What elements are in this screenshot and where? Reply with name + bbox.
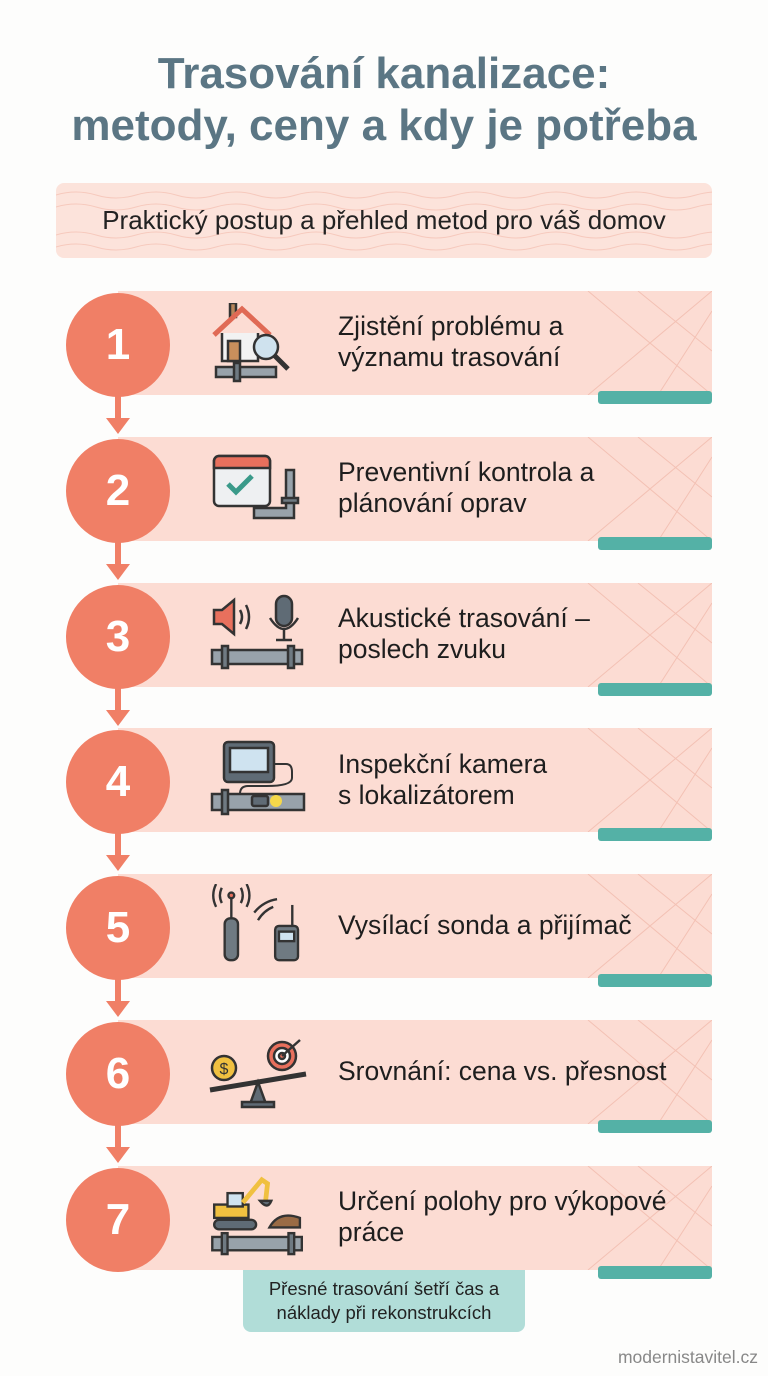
step text 3: Akustické trasování – xyxy=(338,603,590,633)
teal accent bar xyxy=(598,1120,712,1133)
step text 2: Preventivní kontrola a xyxy=(338,457,594,487)
step 3 xyxy=(118,583,712,696)
step 6 xyxy=(118,1020,712,1133)
subtitle banner: Praktický postup a přehled metod pro váš domov xyxy=(102,205,666,235)
arrow 1 xyxy=(106,396,130,434)
icon: house with magnifier xyxy=(212,303,290,382)
teal accent bar xyxy=(598,828,712,841)
number circle 5 xyxy=(66,876,170,980)
title: Trasování kanalizace: xyxy=(158,49,610,98)
number circle 1 xyxy=(66,293,170,397)
arrow 4 xyxy=(106,834,130,871)
callout: Přesné trasování šetří čas a xyxy=(269,1278,499,1299)
number circle 3: 3 xyxy=(106,612,130,661)
icon: speaker and microphone xyxy=(210,594,304,670)
number circle 5: 5 xyxy=(106,903,130,952)
arrow 5 xyxy=(106,980,130,1017)
icon: calendar and pipe xyxy=(212,454,300,520)
number circle 4 xyxy=(66,730,170,834)
step text 5: Vysílací sonda a přijímač xyxy=(338,910,632,940)
title xyxy=(71,49,697,150)
step 7 xyxy=(118,1166,712,1279)
step text 1: významu trasování xyxy=(338,342,560,372)
step 2 xyxy=(118,437,712,550)
step text 2 xyxy=(338,457,594,518)
arrow 2 xyxy=(106,542,130,580)
step 5 xyxy=(118,874,712,987)
step text 4: s lokalizátorem xyxy=(338,780,515,810)
teal accent bar xyxy=(598,537,712,550)
icon: balance coin vs target: $ xyxy=(220,1061,229,1078)
icon: excavator xyxy=(211,1176,303,1256)
icon: probe and receiver xyxy=(212,884,300,962)
arrow 3 xyxy=(106,688,130,726)
teal accent bar xyxy=(598,391,712,404)
step 4 xyxy=(118,728,712,841)
step text 1 xyxy=(338,311,564,372)
callout xyxy=(243,1270,525,1332)
step text 4: Inspekční kamera xyxy=(338,749,547,779)
step text 7: práce xyxy=(338,1217,404,1247)
title: metody, ceny a kdy je potřeba xyxy=(71,101,697,150)
teal accent bar xyxy=(598,1266,712,1279)
icon: monitor camera xyxy=(210,740,306,816)
number circle 2 xyxy=(66,439,170,543)
teal accent bar xyxy=(598,974,712,987)
arrow 6 xyxy=(106,1126,130,1163)
step text 4 xyxy=(338,749,548,810)
callout: náklady při rekonstrukcích xyxy=(277,1302,491,1323)
step text 7: Určení polohy pro výkopové xyxy=(338,1186,666,1216)
number circle 6: 6 xyxy=(106,1049,130,1098)
footer source: modernistavitel.cz xyxy=(618,1347,758,1367)
number circle 1: 1 xyxy=(106,320,130,369)
number circle 3 xyxy=(66,585,170,689)
step text 1: Zjistění problému a xyxy=(338,311,563,341)
icon: balance coin vs target xyxy=(210,1039,306,1108)
step text 3: poslech zvuku xyxy=(338,634,506,664)
step text 2: plánování oprav xyxy=(338,488,527,518)
number circle 7 xyxy=(66,1168,170,1272)
subtitle banner xyxy=(56,183,712,258)
number circle 7: 7 xyxy=(106,1195,130,1244)
number circle 6 xyxy=(66,1022,170,1126)
number circle 2: 2 xyxy=(106,466,130,515)
step 1 xyxy=(118,291,712,404)
teal accent bar xyxy=(598,683,712,696)
step text 3 xyxy=(338,603,590,664)
step text 7 xyxy=(338,1186,666,1247)
number circle 4: 4 xyxy=(106,757,130,806)
step text 6: Srovnání: cena vs. přesnost xyxy=(338,1056,666,1086)
